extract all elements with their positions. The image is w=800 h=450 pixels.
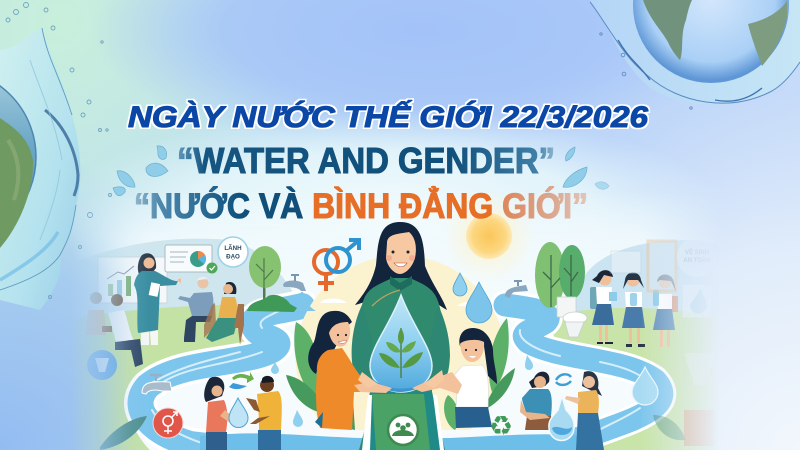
- leadership badge: ĐẠO: [226, 254, 240, 260]
- seated man: [178, 277, 216, 342]
- chart panel: [165, 245, 218, 274]
- globe with water splash: top right: [590, 0, 800, 109]
- women with water bag: bottom right: [520, 371, 604, 450]
- left child in orange ao dai: [308, 311, 392, 430]
- leaves behind figures: [286, 318, 515, 430]
- leadership badge: LÃNH: [224, 245, 242, 252]
- community badge: [388, 415, 418, 445]
- tap and gender circle: [142, 375, 183, 438]
- trees, faucet and toilet: right: [500, 242, 587, 337]
- scene backdrop: [78, 206, 690, 450]
- central woman in ao dai: [352, 222, 450, 450]
- white clouds: [320, 298, 468, 306]
- girl two: [622, 272, 645, 347]
- sleeves: [352, 305, 368, 377]
- girl three: [653, 274, 678, 347]
- small water drops in scene: [271, 355, 533, 427]
- school building and message bubble: [611, 237, 717, 318]
- globe with water splash: left: [0, 2, 112, 310]
- bottom water band: [200, 433, 590, 450]
- face: [386, 232, 416, 274]
- water sharing couple: bottom left: [204, 372, 282, 450]
- sun: [451, 198, 528, 274]
- gender symbols: [314, 240, 359, 291]
- white drop outline in river: [632, 367, 658, 405]
- right child in white shirt: [412, 328, 497, 428]
- hands around drop: [358, 370, 443, 384]
- river: left: [140, 306, 302, 450]
- faded SDG circle: [87, 350, 117, 380]
- heading: water and gender english: “WATER AND GENDER”: [177, 140, 555, 181]
- school building and message bubble: VỆ SINH: [685, 248, 709, 256]
- teacher: [134, 253, 181, 345]
- water drops: central right: [453, 273, 492, 323]
- hair: [355, 222, 447, 310]
- icon: recycling: ♻: [489, 411, 513, 442]
- left hill and grass: [78, 238, 292, 450]
- faded toilet, leaves and SDG card: [653, 353, 715, 446]
- training group: left: [86, 237, 248, 438]
- right hill and grass: [553, 240, 712, 450]
- schoolgirls group: right: [590, 237, 717, 446]
- river: right: [505, 305, 662, 446]
- title: NGÀY NƯỚC THẾ GIỚI 22/3/2026: [128, 100, 648, 134]
- girl one: [590, 270, 617, 344]
- illustration scene: [60, 190, 740, 450]
- seated audience, fading: [86, 292, 143, 367]
- foreground leaves: bottom left: [100, 416, 147, 450]
- seated woman: [206, 282, 244, 345]
- water drop with sprout held by figures: [370, 295, 432, 392]
- floating water drops around heading: [113, 146, 609, 196]
- skirt panel: [370, 392, 440, 450]
- heading: water and gender vietnamese: “NƯỚC VÀ BÌNH ĐẲNG GIỚI”: [134, 186, 588, 226]
- tree and faucet: left: [247, 246, 316, 312]
- dress: [352, 278, 450, 450]
- pale circle behind central figures: [295, 255, 506, 430]
- leadership badge: [218, 237, 248, 267]
- whiteboard: [98, 257, 167, 303]
- school building and message bubble: AN TOÀN: [683, 257, 711, 264]
